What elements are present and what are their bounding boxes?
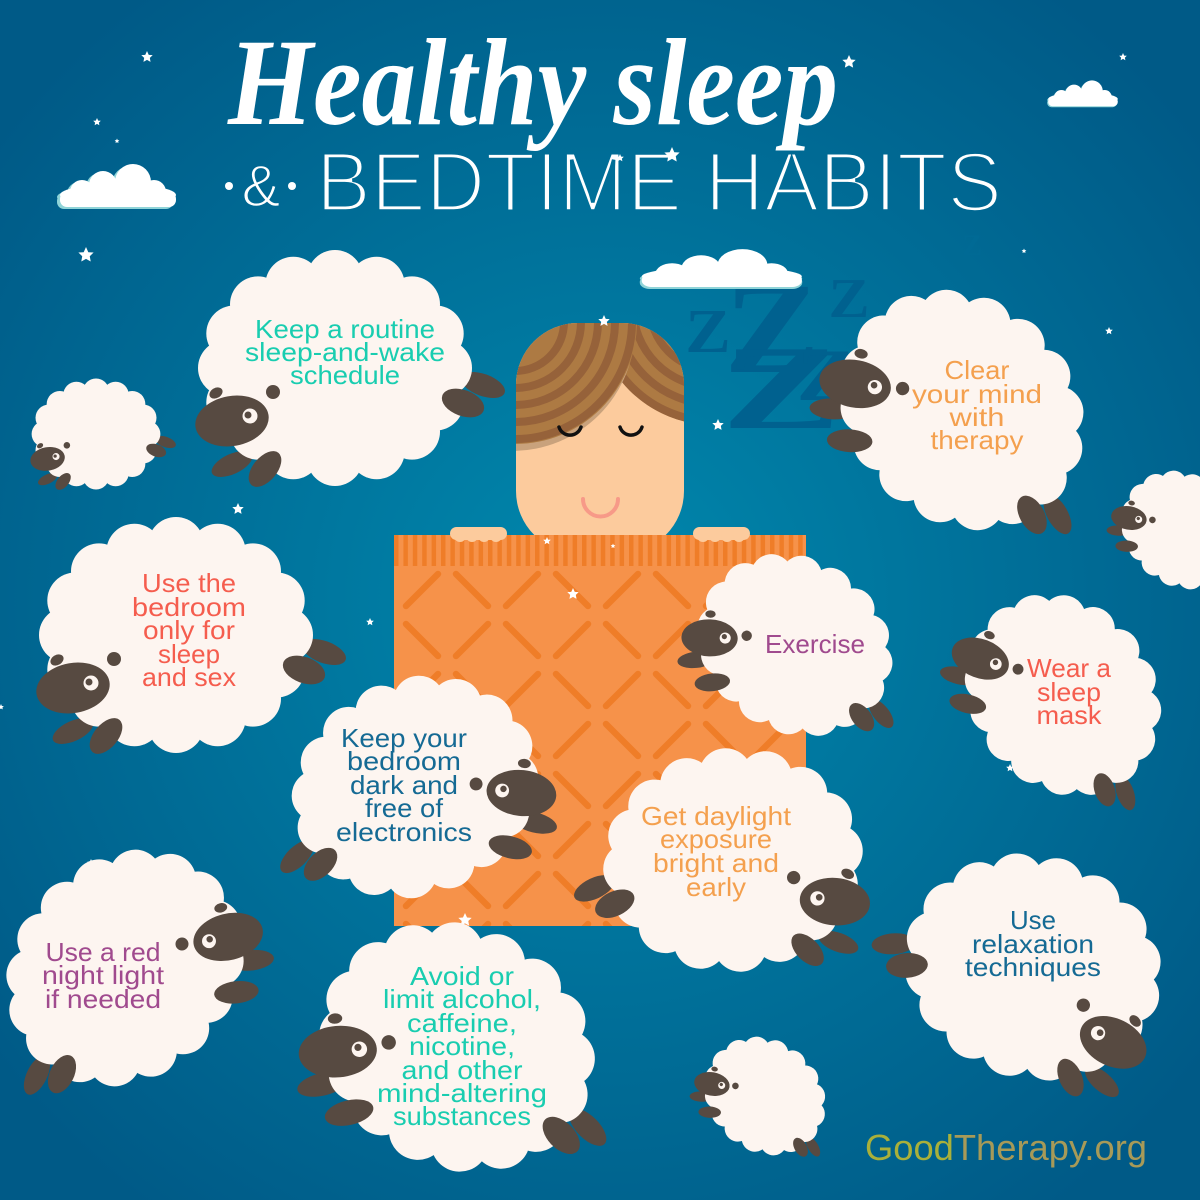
hair: [516, 323, 684, 451]
text: red night light: if needed: [45, 984, 161, 1014]
text: avoid substances: Avoid or: [410, 961, 514, 991]
text: bedroom only: bedroom: [132, 592, 246, 622]
cloud top left: [57, 164, 176, 209]
sheep: bedroom only: [32, 517, 349, 760]
hand left: [450, 527, 507, 542]
sheep: avoid substances: [264, 872, 670, 1200]
title: Healthy sleep: Healthy sleep: [227, 14, 838, 151]
text: sleep mask: [1027, 653, 1112, 730]
text: avoid substances: caffeine,: [407, 1008, 517, 1038]
text: avoid substances: and other: [402, 1055, 523, 1085]
small sheep bottom: [673, 1009, 863, 1194]
sheep: clear your mind: [777, 233, 1160, 609]
sheep: exercise: [652, 513, 950, 792]
text: daylight: exposure: [660, 824, 772, 854]
text: daylight: Get daylight: [641, 801, 792, 831]
hand right: [693, 527, 750, 542]
text: relaxation: [965, 905, 1101, 982]
zzz sleep letters: Z: [828, 268, 870, 329]
text: dark bedroom: [336, 723, 472, 847]
title: & Bedtime Habits: &: [242, 154, 280, 219]
text: therapy: with: [948, 402, 1004, 432]
text: sleep mask: sleep: [1037, 677, 1101, 707]
text: sleep mask: mask: [1036, 700, 1103, 730]
text: bedroom only: [132, 568, 246, 692]
text: dark bedroom: Keep your: [341, 723, 467, 753]
text: avoid substances: limit alcohol,: [383, 984, 541, 1014]
small sheep right: [1090, 443, 1200, 628]
text: bedroom only: sleep: [158, 639, 220, 669]
text: therapy: therapy: [930, 425, 1024, 455]
text: therapy: Clear: [944, 355, 1010, 385]
blanket: [394, 535, 806, 926]
text: therapy: [912, 355, 1042, 455]
text: bedroom only: Use the: [142, 568, 236, 598]
sheep: relaxation: [842, 814, 1195, 1119]
sheep: daylight: [559, 736, 879, 992]
zzz sleep letters: [685, 229, 982, 455]
text: dark bedroom: dark and: [350, 770, 458, 800]
person: head: [516, 323, 684, 535]
text: bedroom only: and sex: [142, 662, 236, 692]
small sheep left: [28, 379, 177, 493]
zzz sleep letters: Z: [962, 229, 982, 262]
text: red night light: [42, 937, 165, 1014]
text: routine: [245, 314, 445, 390]
text: red night light: night light: [42, 960, 165, 990]
logo: GoodTherapy.org: [865, 1127, 1147, 1168]
text: dark bedroom: electronics: [336, 817, 472, 847]
text: relaxation: techniques: [965, 952, 1101, 982]
zzz sleep letters: Z: [724, 256, 820, 401]
stars: [0, 51, 1127, 866]
text: avoid substances: substances: [393, 1101, 531, 1131]
sheep: sleep mask: [914, 547, 1200, 862]
text: therapy: your mind: [912, 379, 1042, 409]
text: dark bedroom: free of: [365, 793, 444, 823]
text: dark bedroom: bedroom: [347, 746, 461, 776]
text: bedroom only: only for: [143, 615, 235, 645]
text: daylight: [641, 801, 792, 902]
text: avoid substances: [377, 961, 547, 1131]
sheep: red night light: [0, 793, 306, 1164]
text: routine: schedule: [290, 360, 400, 390]
title: & Bedtime Habits: BEDTIME HABITS: [316, 135, 1002, 229]
zzz sleep letters: Z: [796, 334, 856, 416]
text: daylight: bright and: [653, 848, 779, 878]
eyes: [559, 427, 642, 435]
text: avoid substances: mind-altering: [377, 1078, 547, 1108]
smile: [583, 499, 618, 516]
zzz sleep letters: Z: [722, 322, 842, 455]
text: relaxation: relaxation: [972, 929, 1094, 959]
text: routine: sleep-and-wake: [245, 337, 445, 367]
text: routine: Keep a routine: [255, 314, 435, 344]
sheep: dark bedroom: [225, 632, 587, 958]
star on blanket edge: [458, 913, 472, 926]
text: relaxation: Use: [1010, 905, 1056, 935]
text: exercise: Exercise: [765, 629, 865, 659]
cloud centre: [640, 249, 802, 289]
text: red night light: Use a red: [46, 937, 160, 967]
zzz sleep letters: Z: [685, 298, 731, 366]
text: daylight: early: [686, 872, 746, 902]
cloud top right: [1047, 80, 1118, 107]
text: sleep mask: Wear a: [1027, 653, 1112, 683]
text: avoid substances: nicotine,: [409, 1031, 515, 1061]
sheep: routine: [191, 250, 508, 493]
